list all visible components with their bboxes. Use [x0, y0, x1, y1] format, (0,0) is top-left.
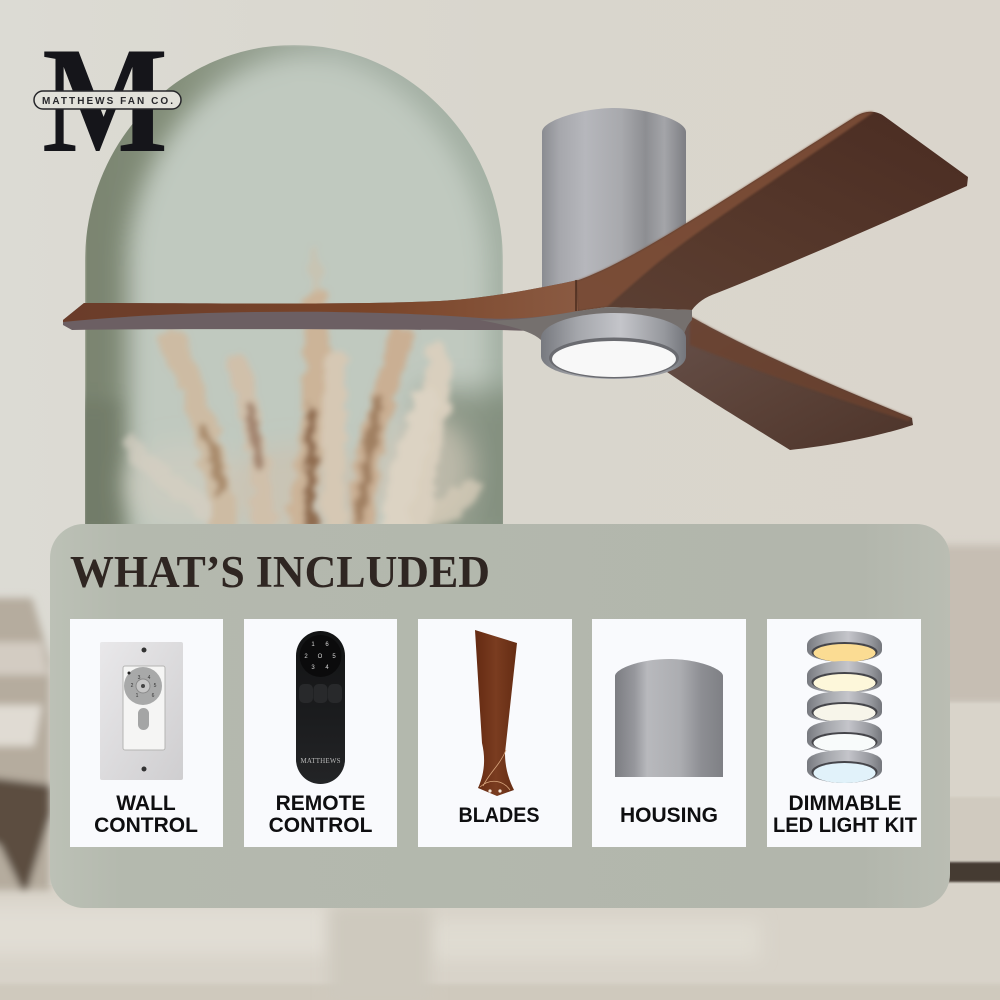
- fan hub underside: [480, 307, 692, 345]
- card: wall control: [70, 619, 223, 847]
- icon: wall control: 4: [148, 675, 151, 681]
- icon: housing: [615, 659, 723, 777]
- panel: what's included: [50, 524, 950, 908]
- icon: remote control: 2: [304, 654, 308, 660]
- label: WALL: [116, 792, 176, 815]
- icon: remote control: 1: [311, 642, 315, 648]
- pampas grass: [125, 255, 473, 535]
- fan blade: left: [63, 280, 585, 331]
- fan housing: [542, 108, 686, 290]
- icon: remote control: [296, 631, 345, 784]
- background: floor: [0, 885, 1000, 1000]
- icon: remote control: 5: [332, 654, 336, 660]
- label: DIMMABLE: [788, 792, 902, 815]
- icon: wall control: [100, 642, 183, 780]
- label: CONTROL: [94, 814, 198, 837]
- icon: wall control: 3: [138, 675, 141, 681]
- logo: M: [42, 16, 168, 184]
- fan blade: upper right: [576, 112, 968, 311]
- card: housing: [592, 619, 746, 847]
- icon: remote control: MATTHEWS: [300, 757, 341, 765]
- icon: blade: [475, 630, 517, 796]
- label: CONTROL: [269, 814, 373, 837]
- icon: remote control: O: [318, 654, 323, 660]
- label: BLADES: [458, 804, 540, 827]
- icon: remote control: 3: [311, 665, 315, 671]
- heading: WHAT’S INCLUDED: [70, 547, 490, 597]
- card: dimmable led light kit: [767, 619, 921, 847]
- card: blades: [418, 619, 572, 847]
- label: HOUSING: [620, 804, 718, 827]
- fan: ceiling fan product: [63, 108, 968, 450]
- icon: remote control: 6: [325, 642, 329, 648]
- icon: remote control: 4: [325, 665, 329, 671]
- icon: wall control: 1: [136, 693, 139, 699]
- background: sofa right: [930, 545, 1000, 882]
- label: LED LIGHT KIT: [773, 814, 917, 837]
- logo: MATTHEWS FAN CO.: [42, 96, 173, 107]
- icon: wall control: 5: [154, 683, 157, 689]
- icon: light kit stack: [807, 631, 882, 783]
- fan blade: lower right: [667, 316, 913, 450]
- label: REMOTE: [276, 792, 365, 815]
- icon: wall control: 2: [131, 683, 134, 689]
- background: arched niche with pampas grass: [85, 45, 503, 524]
- background: cushions left: [0, 598, 50, 890]
- fan light kit: [541, 313, 686, 379]
- icon: wall control: 6: [152, 693, 155, 699]
- card: remote control: [244, 619, 397, 847]
